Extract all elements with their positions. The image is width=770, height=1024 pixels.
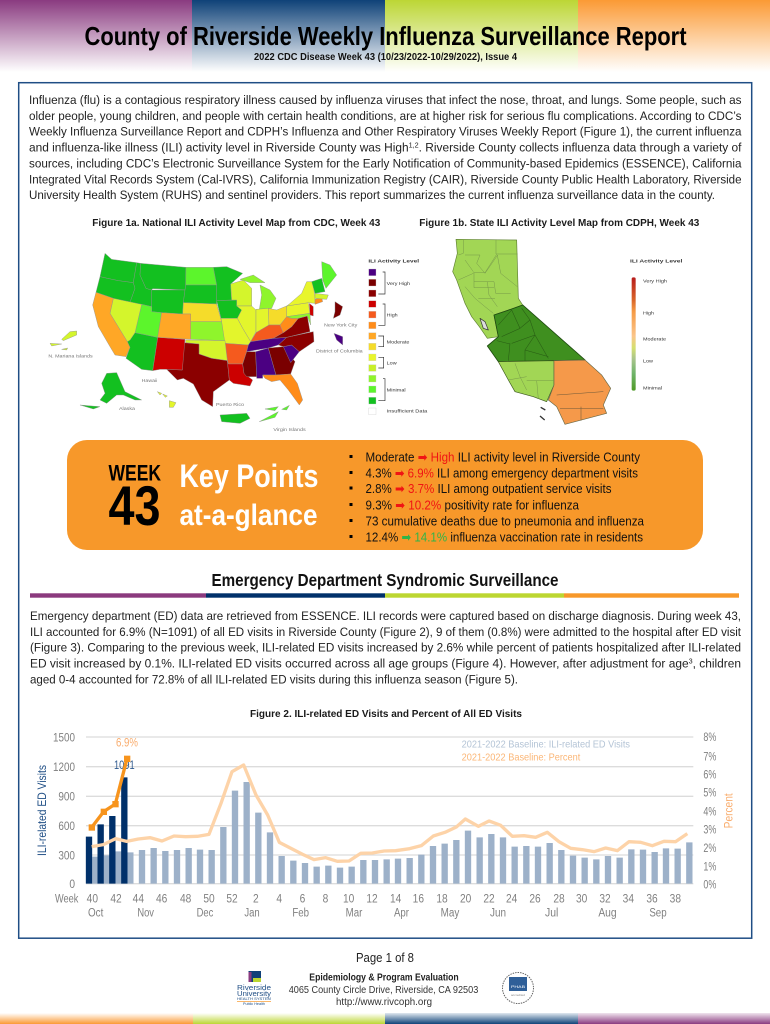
intro paragraph: older people, young children, and people with certain health conditions, are at higher risk for serious flu complications. According to CDC’s [29,109,742,123]
week axis labels: 38 [670,892,681,906]
week number: 43 [108,474,160,537]
intro paragraph [29,93,742,202]
emergency department paragraph: ED visit increased by 0.1%. ILI-related ED visits occurred across all age groups (Figure 4). However, after adjustment for age [30,656,715,670]
left axis labels: 900 [58,790,75,804]
legend: state ILI activity level: High [643,311,654,317]
main panel border [19,83,752,938]
left axis title: ILI-related ED Visits [36,765,49,856]
chart legend [462,740,630,764]
key points heading [180,458,318,532]
right axis labels: 3% [703,822,716,836]
week axis labels: 42 [110,892,122,906]
week axis labels: 28 [553,892,565,906]
month axis labels: Apr [394,906,409,920]
month axis labels: Nov [137,906,155,920]
intro paragraph: University Health System (RUHS) and sentinel providers. This report summarizes the current influenza surveillance data in the county. [29,188,715,202]
legend: state ILI activity level: Low [643,358,653,364]
chart: ILI-related ED visits and percent [36,730,735,920]
US ILI activity map: Puerto Rico [216,402,244,408]
week axis labels: 10 [343,892,354,906]
emergency department paragraph: , children [693,656,741,670]
legend: national ILI activity level [368,259,428,415]
week axis labels: 14 [390,892,401,906]
icon: RUHS logo: University [237,989,271,998]
icon: RUHS logo: Riverside [237,983,271,992]
right axis labels: 0% [703,877,716,891]
week axis labels: 30 [576,892,587,906]
week axis labels: Week [55,892,79,906]
left axis labels: 600 [58,819,75,833]
week axis labels: 26 [529,892,541,906]
month axis labels: Feb [292,906,309,920]
US ILI activity map: N. Mariana Islands [48,354,93,360]
week axis labels: 12 [366,892,378,906]
left axis labels: 1200 [53,760,75,774]
week axis labels: 16 [413,892,424,906]
right axis labels: 6% [703,767,716,781]
emergency department paragraph: Emergency department (ED) data are retrieved from ESSENCE. ILI records were captured based on discharge diagnosis. During week 43, [30,609,741,623]
key points list: 2.8% ➡ 3.7% ILI among outpatient service visits [366,481,612,497]
key points list: 9.3% ➡ 10.2% positivity rate for influenza [366,498,580,514]
week axis labels: 6 [300,892,305,906]
icon: RUHS logo: HEALTH SYSTEM [237,997,271,1001]
month axis labels: Mar [346,906,362,920]
week axis labels: 32 [599,892,611,906]
figure 2 caption: Figure 2. ILI-related ED Visits and Percent of All ED Visits [250,708,522,720]
footer contact block: http://www.rivcoph.org [336,996,432,1008]
key points list: Moderate ➡ High ILI activity level in Riverside County [366,450,640,466]
legend: state ILI activity level: ILI Activity Level [630,258,683,264]
week axis labels: 20 [460,892,471,906]
icon: accreditation seal: PHAB [511,985,526,989]
icon: accreditation seal: accredited [511,993,525,997]
current season bars [89,777,124,884]
legend: national ILI activity level: Moderate [387,339,410,345]
page number: Page 1 of 8 [356,951,414,965]
baseline bars [95,782,689,884]
legend: national ILI activity level: Low [387,360,397,366]
left axis labels: 1500 [53,730,75,744]
left axis labels [53,730,75,891]
icon: RUHS logo [237,971,271,1006]
week axis labels: 8 [323,892,328,906]
chart legend: 2021-2022 Baseline: Percent [462,753,580,764]
right axis labels: 2% [703,841,716,855]
intro paragraph: Influenza (flu) is a contagious respiratory illness caused by influenza viruses that infect the nose, throat, and lungs. Some people, such as [29,93,742,107]
month axis labels [88,906,667,920]
legend: state ILI activity level [630,258,683,391]
subtitle: 2022 CDC Disease Week 43 (10/23/2022-10/29/2022), Issue 4 [254,52,517,63]
emergency department paragraph: (Figure 3). Comparing to the previous week, ILI-related ED visits increased by 2.6% while percent of patients hospitalized after ILI-related [30,640,741,654]
week axis labels: 46 [156,892,167,906]
right axis labels [703,730,716,891]
section heading: emergency department: Emergency Department Syndromic Surveillance [212,570,559,590]
legend: national ILI activity level: High [387,313,398,319]
week axis labels: 48 [180,892,191,906]
key points list [350,450,645,546]
intro paragraph: sources, including CDC’s Electronic Surveillance System for the Early Notification of Community-based Epidemics (ESSENCE), California [29,156,742,170]
footer contact block [289,973,478,1008]
US ILI activity map: Hawaii [142,378,157,384]
icon: RUHS logo: Public Health [243,1002,265,1006]
right axis labels: 7% [703,749,716,763]
week axis labels: 24 [506,892,517,906]
US ILI activity map: District of Columbia [316,349,363,355]
right axis labels: 4% [703,804,716,818]
right axis labels: 8% [703,730,716,744]
legend: state ILI activity level: Very High [643,278,667,284]
intro paragraph: Weekly Influenza Surveillance Report and CDPH’s Influenza and Other Respiratory Viruses Weekly Report (Figure 1), the current influenza [29,124,742,138]
right axis labels: 5% [703,786,716,800]
intro paragraph: 1,2 [409,140,419,150]
data label: percent: 6.9% [116,735,138,749]
left axis labels: 300 [58,848,75,862]
legend: national ILI activity level: ILI Activity Level [368,259,420,265]
emergency department paragraph [30,609,742,686]
chart legend: 2021-2022 Baseline: ILI-related ED Visits [462,740,630,751]
right axis labels: 1% [703,859,716,873]
week axis labels: 50 [203,892,215,906]
key points list: 12.4% ➡ 14.1% influenza vaccination rate in residents [366,530,643,546]
footer contact block: Epidemiology & Program Evaluation [309,973,459,984]
week axis labels [55,892,681,906]
week axis labels: 40 [87,892,98,906]
panel: key points at-a-glance [67,440,703,550]
US ILI activity map: New York City [324,323,358,329]
legend: national ILI activity level: Very High [387,281,410,287]
US ILI activity map: Alaska [119,406,135,412]
week axis labels: 44 [133,892,144,906]
figure 1a caption: Figure 1a. National ILI Activity Level Map from CDC, Week 43 [92,217,380,229]
left axis labels: 0 [69,877,75,891]
week number: WEEK [108,461,161,486]
key points list: 73 cumulative deaths due to pneumonia and influenza [366,514,645,528]
current percent line [89,756,130,831]
right axis title: Percent [722,793,735,828]
legend: state ILI activity level: Minimal [643,385,662,391]
week axis labels: 52 [226,892,238,906]
California ILI activity map [453,239,611,424]
month axis labels: Aug [598,906,617,920]
figure 1b caption: Figure 1b. State ILI Activity Level Map from CDPH, Week 43 [419,217,699,229]
month axis labels: Sep [649,906,667,920]
week axis labels: 18 [436,892,448,906]
week axis labels: 34 [623,892,634,906]
emergency department paragraph: 3 [689,656,693,666]
icon: accreditation seal [502,972,534,1004]
month axis labels: Jul [545,906,558,920]
week axis labels: 22 [483,892,495,906]
footer contact block: 4065 County Circle Drive, Riverside, CA 92503 [289,984,478,996]
legend: national ILI activity level: Insufficient Data [387,409,428,415]
week axis labels: 36 [646,892,658,906]
key points heading: at-a-glance [180,499,318,532]
key points list: 4.3% ➡ 6.9% ILI among emergency department visits [366,466,638,482]
legend: national ILI activity level: Minimal [387,388,406,394]
month axis labels: May [441,906,460,920]
month axis labels: Jan [244,906,260,920]
week axis labels: 2 [253,892,259,906]
section colour rule [30,593,739,598]
key points heading: Key Points [180,458,318,494]
intro paragraph: . Riverside County collects influenza data through a variety of [419,140,742,154]
month axis labels: Dec [197,906,213,920]
header colour band [0,0,770,72]
emergency department paragraph: ILI accounted for 6.9% (N=1091) of all ED visits in Riverside County (Figure 2), 9 of them (0.8%) were admitted to the hospital after ED visit [30,625,742,639]
week axis labels: 4 [276,892,282,906]
footer colour band [0,1013,770,1024]
US ILI activity map [48,253,363,433]
intro paragraph: and influenza-like illness (ILI) activity level in Riverside County was High [29,140,424,154]
data label: visits: 1091 [114,758,135,772]
legend: state ILI activity level: Moderate [643,337,666,343]
month axis labels: Oct [88,906,104,920]
month axis labels: Jun [490,906,506,920]
US ILI activity map: Virgin Islands [273,427,306,433]
emergency department paragraph: aged 0-4 accounted for 72.8% of all ILI-related ED visits during this influenza season (Figure 5). [30,672,518,686]
baseline percent line [92,765,687,861]
